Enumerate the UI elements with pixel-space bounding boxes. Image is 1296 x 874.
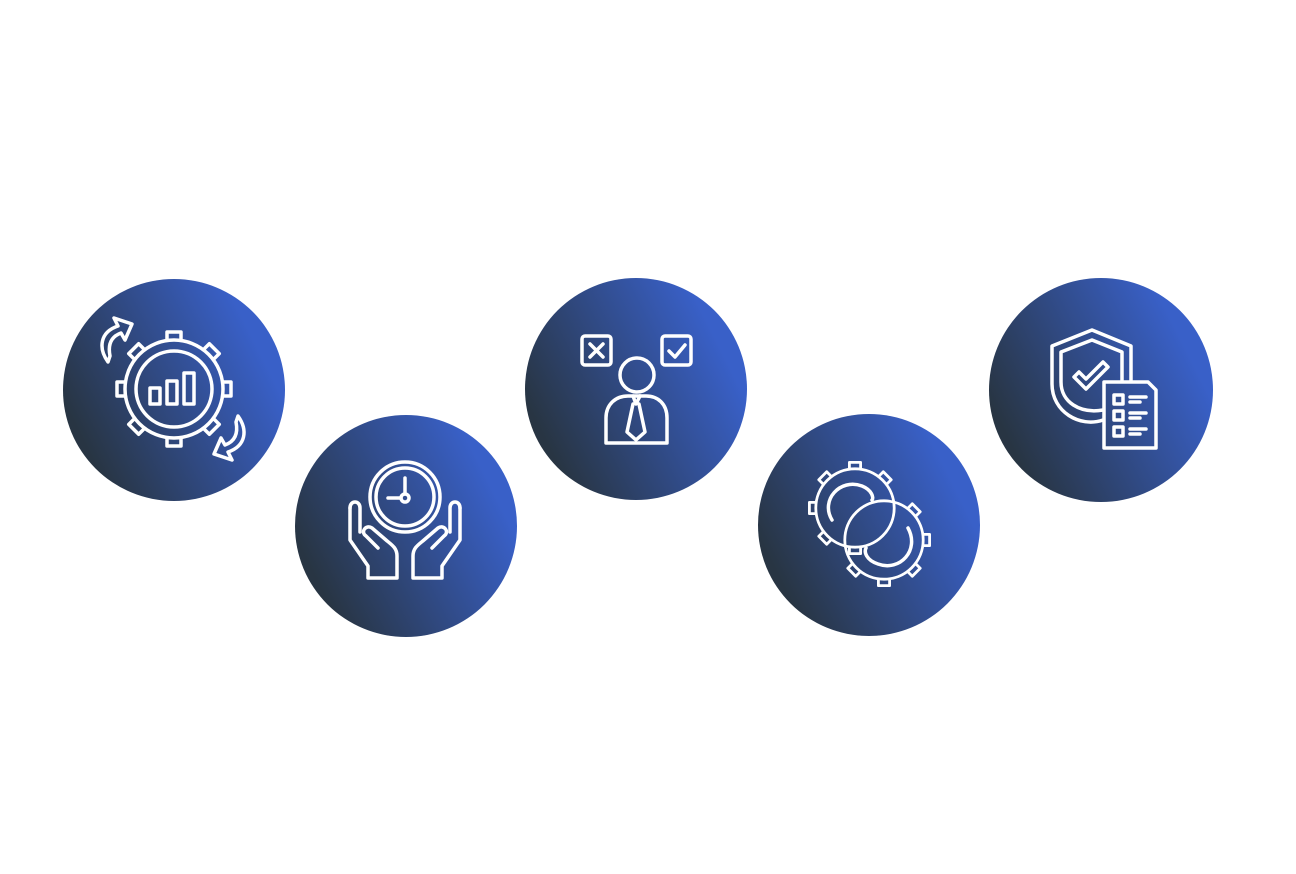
circle 4: two gears: [758, 414, 980, 636]
circle 1: gear with chart: [63, 279, 285, 501]
icon: businessman with x and check boxes: [582, 336, 691, 443]
icon: gear with bar chart and arrows: [102, 318, 244, 460]
circle 2: hands holding clock: [295, 415, 517, 637]
circle 3: person with choices: [525, 278, 747, 500]
icon: shield and document: [1052, 330, 1156, 448]
icon: hands with clock: [350, 462, 460, 578]
icon: interlocking gears: [809, 462, 930, 586]
circle 5: shield with checklist: [989, 278, 1213, 502]
